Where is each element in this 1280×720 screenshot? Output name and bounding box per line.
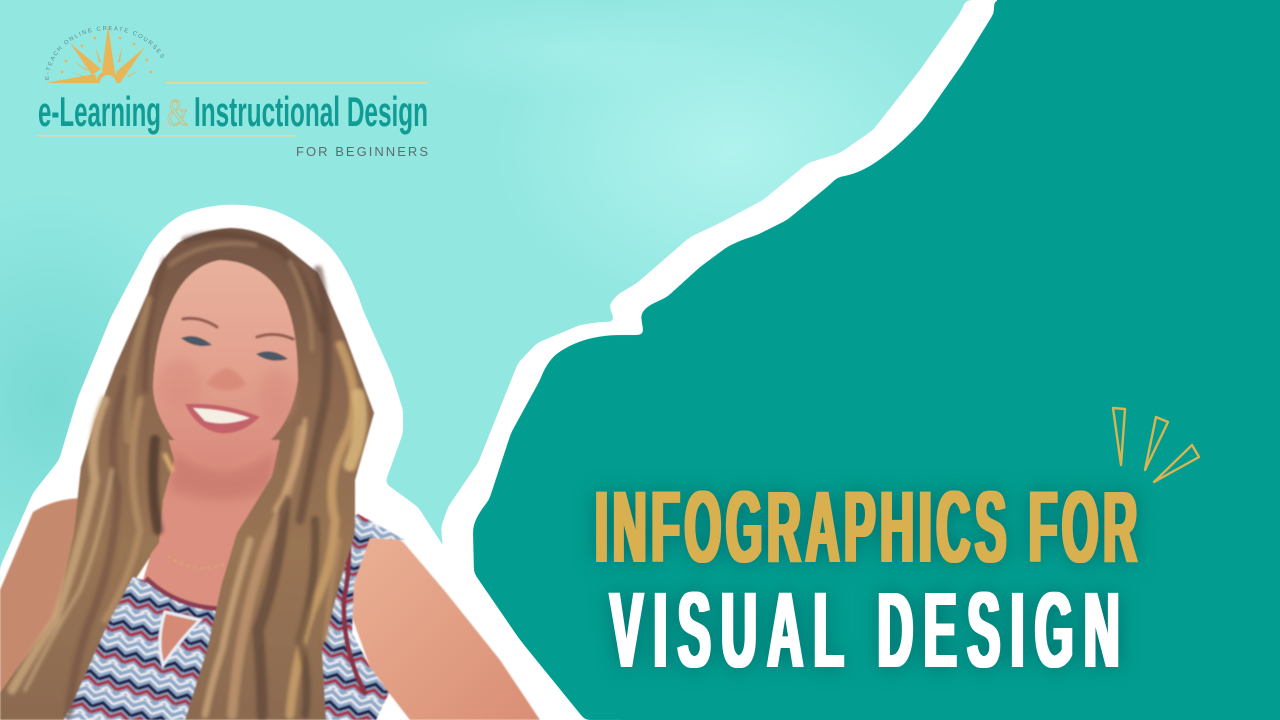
back hair [0, 228, 374, 720]
wordmark right: Instructional Design [194, 88, 428, 135]
icon: sunburst [45, 25, 152, 83]
left hair panel [0, 293, 174, 720]
title line 1: INFOGRAPHICS FOR [595, 469, 1142, 584]
wordmark left: e-Learning [38, 88, 161, 135]
eyes [181, 336, 288, 361]
eyebrows [183, 318, 293, 339]
hair strands [12, 234, 361, 715]
ampersand: & [167, 92, 188, 134]
panel: white torn edge [441, 0, 1040, 720]
patterned top [64, 514, 405, 720]
rule bottom [37, 135, 297, 137]
teeth [193, 408, 250, 423]
logo [37, 25, 428, 159]
nose [207, 368, 246, 390]
neckline band [146, 578, 222, 609]
title [595, 469, 1142, 690]
strap edge [344, 525, 366, 695]
mouth [185, 404, 260, 433]
arc tagline: E-TEACH ONLINE CREATE COURSES [44, 26, 164, 80]
left arm [0, 498, 85, 700]
right arm [352, 535, 540, 720]
title line 2: VISUAL DESIGN [610, 569, 1130, 690]
subtitle: FOR BEGINNERS [296, 144, 428, 159]
keyhole [160, 612, 200, 665]
face [153, 260, 298, 464]
photo: woman smiling [0, 205, 582, 720]
right hair panel [185, 273, 374, 720]
white cutout halo [0, 205, 582, 720]
sparkle: three gold spikes [1113, 408, 1199, 482]
necklace [168, 556, 224, 568]
cheek blush right [259, 369, 295, 421]
cheek blush [158, 359, 202, 411]
neck and chest [140, 440, 280, 612]
panel: teal torn shape [473, 0, 1280, 720]
rule top [166, 82, 427, 84]
neck shadow [170, 450, 275, 500]
